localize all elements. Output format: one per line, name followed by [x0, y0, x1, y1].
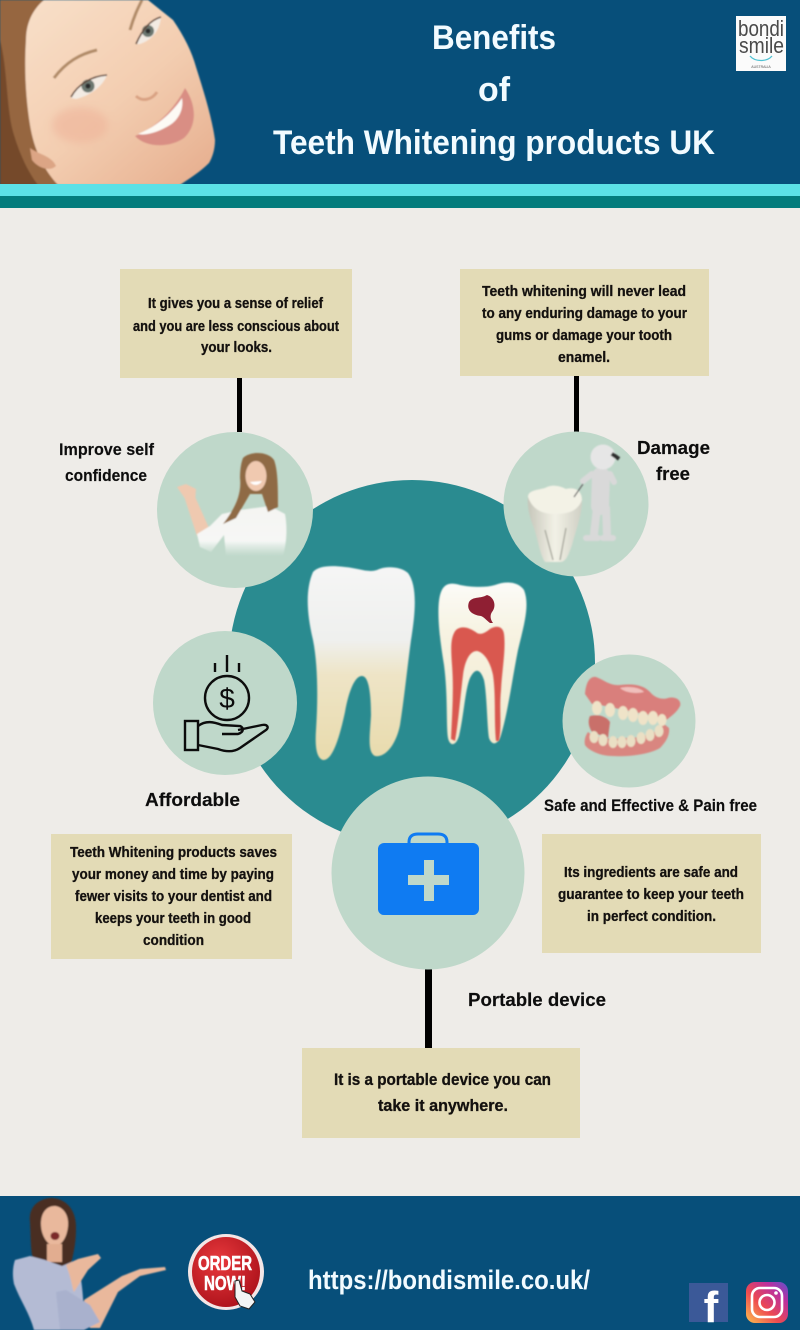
photo: woman in white shirt: [177, 453, 286, 556]
photo: dentures: [585, 677, 680, 756]
order now button: ORDER: [198, 1253, 252, 1275]
panel: no damage: enamel.: [558, 349, 610, 366]
big white tooth: [308, 566, 415, 760]
circle: improve self confidence: [157, 432, 313, 588]
label: improve self confidence: Improve self: [59, 440, 154, 459]
label: damage free: free: [656, 464, 690, 484]
icon: facebook: [689, 1283, 728, 1330]
website url: https://bondismile.co.uk/: [308, 1265, 590, 1295]
logo: bondi smile: smile: [739, 33, 784, 58]
panel: safe ingredients: [542, 834, 761, 953]
tooth cavity: [468, 595, 494, 623]
panel: no damage: to any enduring damage to your: [482, 305, 687, 322]
icon: instagram: [746, 1282, 788, 1323]
panel: relief: your looks.: [201, 339, 272, 356]
icon: coin in open hand: [185, 655, 268, 751]
panel: safe ingredients: Its ingredients are safe and: [564, 864, 738, 881]
title: Teeth Whitening products UK: [273, 124, 715, 162]
label: improve self confidence: [59, 440, 154, 485]
illustration: tooth and figure: [528, 444, 620, 562]
panel: no damage: gums or damage your tooth: [496, 327, 672, 344]
logo: bondi smile: AUSTRALIA: [751, 65, 771, 69]
logo: bondi smile: [736, 16, 786, 71]
circle: portable device: [332, 776, 524, 970]
header banner: [0, 0, 800, 185]
panel: saves money: Teeth Whitening products saves: [70, 844, 277, 861]
circle: damage free: [504, 432, 648, 576]
panel: portable: It is a portable device you can: [334, 1071, 551, 1089]
panel: saves money: your money and time by paying: [72, 866, 274, 883]
panel: portable: [302, 1048, 580, 1138]
panel: portable: take it anywhere.: [378, 1097, 508, 1115]
tooth pulp: [451, 627, 505, 741]
panel: no damage: Teeth whitening will never lead: [482, 283, 686, 300]
icon: pointer hand: [235, 1280, 255, 1309]
logo: bondi smile: bondi: [738, 16, 784, 41]
photo: woman pointing: [13, 1198, 166, 1330]
order now button: [188, 1234, 264, 1310]
footer banner: [0, 1196, 800, 1330]
central teal circle: [229, 480, 595, 846]
panel: safe ingredients: in perfect condition.: [587, 908, 716, 925]
connector lines: [237, 376, 579, 1048]
panel: saves money: fewer visits to your dentist and: [75, 888, 272, 905]
order now button: NOW!: [204, 1273, 246, 1295]
icon: blue first aid kit: [378, 834, 479, 915]
label: affordable: Affordable: [145, 790, 240, 810]
icon: dollar sign: $: [219, 683, 235, 714]
label: improve self confidence: confidence: [65, 466, 147, 485]
panel: saves money: keeps your teeth in good: [95, 910, 251, 927]
label: damage free: Damage: [637, 438, 710, 458]
panel: safe ingredients: guarantee to keep your teeth: [558, 886, 744, 903]
title: of: [478, 71, 511, 109]
label: damage free: [637, 438, 710, 484]
label: safe and effective: Safe and Effective & Pain free: [544, 796, 757, 815]
circle: affordable: [153, 631, 297, 775]
panel: saves money: condition: [143, 932, 204, 949]
panel: relief: It gives you a sense of relief: [148, 295, 324, 312]
label: portable device: Portable device: [468, 990, 606, 1010]
panel: relief: and you are less conscious about: [133, 318, 339, 335]
panel: relief: [120, 269, 352, 378]
title: Benefits: [432, 19, 556, 57]
panel: no damage: [460, 269, 709, 376]
photo: smiling woman: [0, 0, 215, 185]
tooth cross-section: [438, 582, 526, 744]
header stripes: [0, 184, 800, 208]
panel: saves money: [51, 834, 292, 959]
title: [273, 19, 715, 162]
circle: safe and effective: [562, 654, 696, 788]
